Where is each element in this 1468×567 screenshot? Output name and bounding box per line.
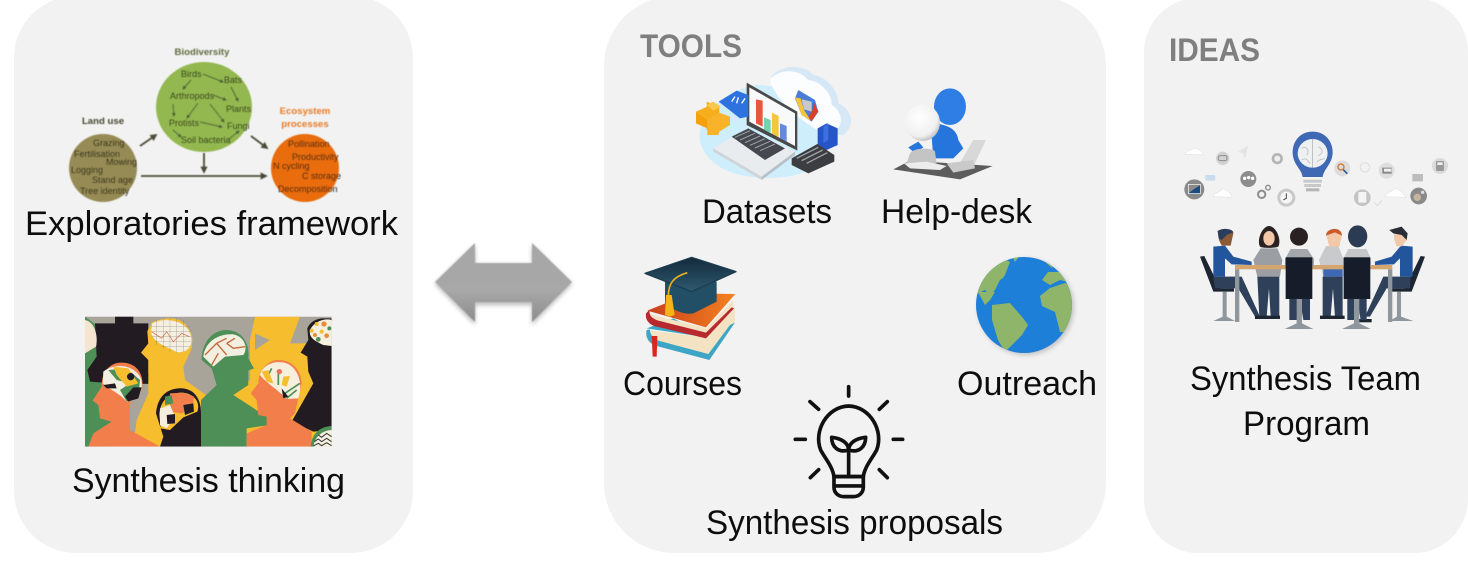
yellow head right xyxy=(230,317,332,447)
label: Courses: Courses xyxy=(623,365,742,403)
brain bulb xyxy=(1293,132,1333,191)
cream top-left brain xyxy=(85,320,97,353)
label: Synthesis Team Program: Program xyxy=(1243,405,1370,443)
biodiversity labels xyxy=(169,69,252,145)
land use labels: Tree identity xyxy=(80,186,130,196)
ecosystem labels: N cycling xyxy=(273,161,310,171)
person with ginger hair xyxy=(1319,246,1344,277)
label: Exploratories framework: Exploratories framework xyxy=(25,205,399,243)
circle: land use xyxy=(69,134,137,202)
biodiversity labels: Soil bacteria xyxy=(181,135,231,145)
ecosystem labels: Decomposition xyxy=(278,184,338,194)
biodiversity interaction arrows xyxy=(173,74,239,139)
grid brain xyxy=(151,320,192,353)
heading: Ecosystem processes: processes xyxy=(281,119,329,130)
panel: tools xyxy=(604,0,1106,553)
biodiversity labels: Fungi xyxy=(227,121,250,131)
heading: Ecosystem processes: Ecosystem xyxy=(280,106,330,117)
biodiversity labels: Bats xyxy=(224,75,243,85)
land use labels: Logging xyxy=(71,165,103,175)
woman xyxy=(1253,248,1282,277)
ecosystem labels: C storage xyxy=(302,171,341,181)
icon: light bulb with sprout xyxy=(795,387,903,497)
left chair and person xyxy=(1200,256,1234,292)
panel: ideas xyxy=(1144,0,1468,553)
illustration: synthesis thinking heads xyxy=(85,317,332,447)
ecosystem labels xyxy=(273,139,341,194)
icon: courses books and cap xyxy=(645,257,736,360)
biodiversity labels: Protists xyxy=(169,118,200,128)
biodiversity labels: Birds xyxy=(181,69,202,79)
biodiversity labels: Arthropods xyxy=(170,91,215,101)
land use labels: Mowing xyxy=(106,157,137,167)
land use labels: Stand age xyxy=(92,175,133,185)
label: Synthesis proposals: Synthesis proposals xyxy=(706,504,1003,542)
land use labels: Grazing xyxy=(93,138,125,148)
flow arrows xyxy=(140,135,267,176)
heading: Biodiversity: Biodiversity xyxy=(175,47,230,58)
heading: TOOLS: TOOLS xyxy=(640,28,742,64)
green head center xyxy=(201,330,272,447)
circle: ecosystem processes xyxy=(271,134,339,202)
ecosystem labels: Productivity xyxy=(292,152,339,162)
arrow: two-way exchange xyxy=(435,243,572,325)
left green xyxy=(85,317,98,447)
floating icons xyxy=(1184,146,1448,207)
circle: biodiversity xyxy=(156,62,252,152)
orange head right xyxy=(247,360,312,447)
icon: help-desk figures xyxy=(893,88,993,179)
land use labels: Fertilisation xyxy=(74,149,120,159)
label: Synthesis thinking: Synthesis thinking xyxy=(72,462,345,500)
label: Synthesis Team Program xyxy=(1190,360,1421,443)
black head center xyxy=(156,388,201,447)
orange head left xyxy=(88,363,160,447)
label: Datasets: Datasets xyxy=(702,193,832,231)
diagram: exploratories framework xyxy=(69,47,341,202)
right chair and person xyxy=(1392,256,1425,292)
label: Help-desk: Help-desk xyxy=(881,193,1033,231)
table xyxy=(1235,265,1392,269)
icon: datasets laptop and cloud xyxy=(696,67,851,180)
biodiversity labels: Plants xyxy=(226,104,252,114)
wave brain xyxy=(311,426,332,447)
label: Synthesis Team Program: Synthesis Team xyxy=(1190,360,1421,398)
heading: Land use: Land use xyxy=(82,116,124,127)
icon: globe xyxy=(975,255,1075,355)
back-facing person right xyxy=(1343,249,1371,267)
black head right xyxy=(292,318,332,432)
heading: IDEAS: IDEAS xyxy=(1169,32,1260,68)
panel: framework and thinking xyxy=(14,0,413,553)
label: Outreach: Outreach xyxy=(957,365,1097,403)
illustration: team meeting under idea bulb xyxy=(1184,132,1448,329)
back-facing person left xyxy=(1285,249,1314,267)
yellow head center-left xyxy=(133,318,208,447)
grey notch xyxy=(255,333,270,350)
black head back left xyxy=(87,316,148,384)
land use labels xyxy=(71,138,137,196)
ecosystem labels: Pollination xyxy=(288,139,330,149)
